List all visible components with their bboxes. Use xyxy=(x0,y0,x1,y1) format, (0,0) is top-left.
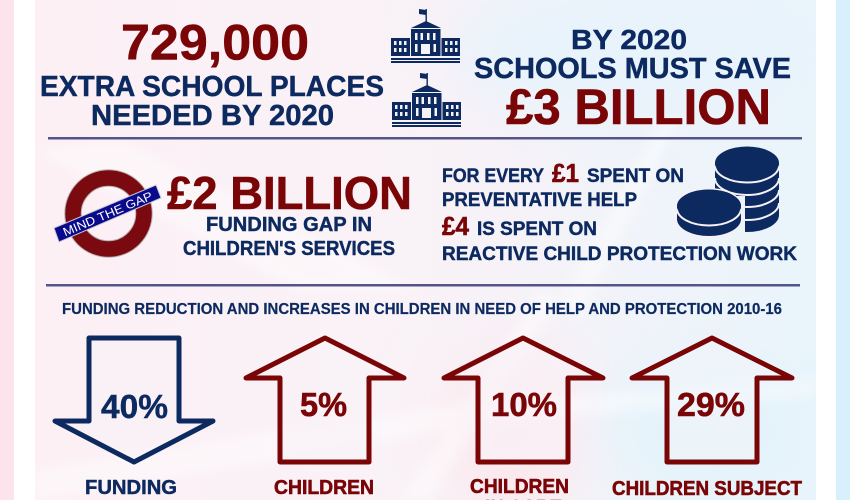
stat: schools must save £3 billion: £3 BILLION xyxy=(506,79,771,135)
stat: £2 billion funding gap: CHILDREN'S SERVICES xyxy=(183,238,395,260)
stat: £2 billion funding gap: FUNDING GAP IN xyxy=(206,214,372,236)
stat: £2 billion funding gap xyxy=(167,167,412,260)
arrow panel: children subject up 29% xyxy=(612,338,802,500)
arrow panel: funding down 40%: 40% xyxy=(101,388,168,425)
stat: £2 billion funding gap: £2 BILLION xyxy=(167,167,412,219)
arrow panel: children subject up 29%: 29% xyxy=(677,386,745,423)
icon: mind the gap roundel: MIND THE GAP xyxy=(61,189,155,239)
heading: funding reduction and increases: FUNDING REDUCTION AND INCREASES IN CHILDREN IN NEED OF HELP AND PROTECTION 2010-16 xyxy=(62,301,782,318)
arrow panel: children up 5%: CHILDREN xyxy=(274,477,374,499)
stat: 729,000 school places: EXTRA SCHOOL PLACES xyxy=(40,71,384,103)
text block: preventative versus reactive spending: REACTIVE CHILD PROTECTION WORK xyxy=(442,243,797,265)
stat: schools must save £3 billion xyxy=(474,24,791,135)
arrow panel: children subject up 29%: CHILDREN SUBJECT xyxy=(612,478,802,500)
arrow panel: children up 5% xyxy=(246,338,404,499)
text block: preventative versus reactive spending: PREVENTATIVE HELP xyxy=(442,189,637,211)
stat: 729,000 school places xyxy=(40,14,384,132)
text block: preventative versus reactive spending: £4 xyxy=(442,211,470,241)
arrow panel: funding down 40% xyxy=(55,338,213,499)
text block: preventative versus reactive spending: IS SPENT ON xyxy=(477,218,597,240)
stat: schools must save £3 billion: SCHOOLS MUST SAVE xyxy=(474,53,791,85)
text block: preventative versus reactive spending xyxy=(442,158,797,265)
arrow panel: children up 5%: 5% xyxy=(300,386,347,423)
arrow panel: children in care up 10%: 10% xyxy=(491,386,557,423)
arrow panel: children in care up 10%: CHILDREN xyxy=(470,476,569,498)
icon: mind the gap roundel xyxy=(54,178,161,249)
text block: preventative versus reactive spending: £1 xyxy=(552,158,579,188)
arrow panel: children in care up 10% xyxy=(444,338,603,500)
stat: schools must save £3 billion: BY 2020 xyxy=(571,24,687,55)
stat: 729,000 school places: NEEDED BY 2020 xyxy=(91,100,334,132)
text block: preventative versus reactive spending: SPENT ON xyxy=(587,165,684,187)
stat: 729,000 school places: 729,000 xyxy=(121,14,309,70)
arrow panel: funding down 40%: FUNDING xyxy=(85,477,177,499)
text block: preventative versus reactive spending: FOR EVERY xyxy=(442,165,544,187)
icon: school building top xyxy=(391,9,460,63)
icon: school building bottom xyxy=(392,73,461,127)
icon: coins xyxy=(677,146,779,236)
